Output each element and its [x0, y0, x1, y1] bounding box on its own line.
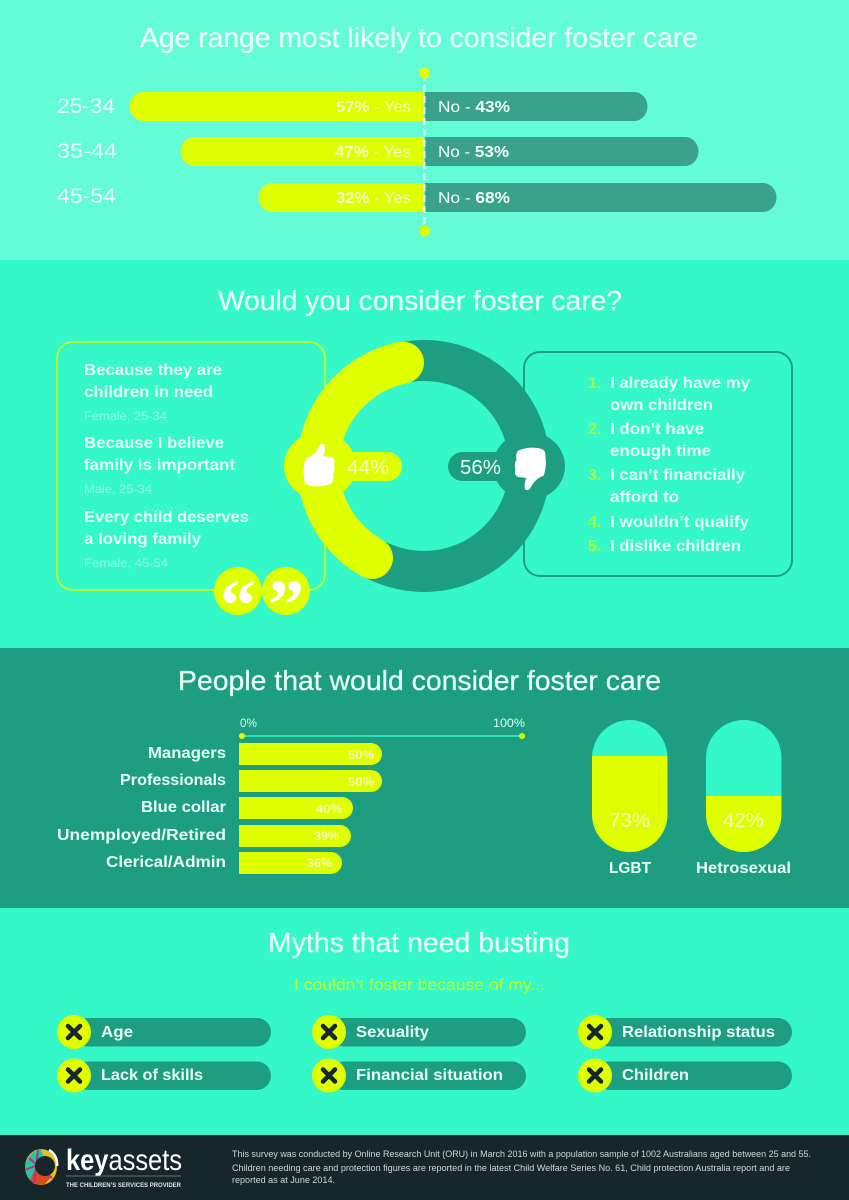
reasons list: 1. [588, 375, 601, 392]
myth: Financial situation [312, 1058, 526, 1092]
reasons list [588, 375, 750, 555]
reasons list: afford to [610, 489, 679, 506]
myth: Relationship status [578, 1015, 792, 1049]
category labels: Blue collar [141, 799, 226, 816]
heading: would you consider: Would you consider foster care? [218, 285, 622, 316]
panel: would you consider [0, 260, 849, 648]
heading: age range: Age range most likely to consider foster care [140, 22, 698, 53]
quotes text: Every child deserves [84, 509, 249, 526]
myth: Children [578, 1058, 792, 1092]
donut chart [284, 360, 565, 572]
myth: Age [57, 1015, 271, 1049]
percent labels: 36% [307, 856, 332, 870]
reasons list: own children [610, 397, 713, 414]
footnote [232, 1149, 811, 1185]
pill chart: Hetrosexual: Hetrosexual [696, 860, 791, 877]
footnote: Children needing care and protection figures are reported in the latest Child Welfare Series No. 61, Child protection Australia report and are [232, 1163, 790, 1173]
category labels: Clerical/Admin [106, 854, 226, 871]
centre axis [419, 68, 430, 236]
pill chart: LGBT: 73% [609, 810, 650, 832]
logo [25, 1144, 182, 1189]
footnote: reported as at June 2014. [232, 1175, 335, 1185]
age labels: 45-54 [57, 185, 116, 208]
pill chart: LGBT: LGBT [609, 860, 651, 877]
pill chart: Hetrosexual: 42% [723, 810, 764, 832]
quotes text: a loving family [84, 531, 201, 548]
value: 44%: 44% [347, 457, 389, 479]
axis [239, 716, 525, 739]
yes labels: 32% - Yes [336, 190, 411, 207]
category labels: Professionals [120, 772, 226, 789]
myth: Lack of skills: Lack of skills [101, 1067, 203, 1084]
reasons list: 5. [588, 538, 601, 555]
icon: quote marks: ” [268, 565, 304, 645]
percent labels: 40% [316, 802, 342, 816]
age labels [57, 95, 117, 208]
quotes text: Female, 25-34 [84, 411, 168, 423]
reasons list: I wouldn’t qualify [610, 514, 749, 531]
reasons list: 4. [588, 514, 601, 531]
tagline: THE CHILDREN’S SERVICES PROVIDER [66, 1182, 181, 1189]
percent labels [307, 748, 374, 870]
myth: Lack of skills [57, 1058, 271, 1092]
age labels: 25-34 [57, 95, 115, 118]
no labels: No - 53% [438, 144, 509, 161]
thumbs up badge [284, 432, 402, 500]
icon: thumbs up [304, 444, 335, 486]
quotes text [84, 362, 249, 570]
percent labels: 39% [314, 829, 339, 843]
bars [239, 743, 382, 874]
myth: Financial situation: Financial situation [356, 1067, 503, 1084]
heading: people: People that would consider foster care [178, 665, 661, 696]
subheading: I couldn’t foster because of my... [294, 977, 545, 994]
icon: quote marks [214, 565, 310, 645]
myth: Age: Age [101, 1024, 133, 1041]
myth: Sexuality: Sexuality [356, 1024, 429, 1041]
bar chart: occupations [57, 716, 525, 874]
no labels [438, 99, 510, 207]
yes labels: 57% - Yes [336, 99, 411, 116]
reasons list: I dislike children [610, 538, 741, 555]
reasons list: enough time [610, 443, 711, 460]
percent labels: 50% [348, 775, 374, 789]
myth: Relationship status: Relationship status [622, 1024, 775, 1041]
yes bars [130, 92, 424, 212]
wordmark: keyassets [66, 1144, 182, 1177]
reasons box [524, 352, 792, 576]
no labels: No - 68% [438, 190, 510, 207]
no bars [425, 92, 776, 212]
panel: people that would consider [0, 648, 849, 908]
quotes text: children in need [84, 384, 213, 401]
category labels [57, 745, 226, 871]
category labels: Unemployed/Retired [57, 827, 226, 844]
thumbs down badge [448, 432, 565, 500]
panel: footer [0, 1135, 849, 1200]
heading: myths: Myths that need busting [268, 927, 570, 958]
yes labels: 47% - Yes [335, 144, 411, 161]
pill chart: LGBT [592, 720, 668, 877]
quotes text: Because I believe [84, 435, 224, 452]
myth: Sexuality [312, 1015, 526, 1049]
reasons list: I already have my [610, 375, 750, 392]
quotes text: Because they are [84, 362, 222, 379]
pill chart: Hetrosexual [696, 720, 791, 877]
age labels: 35-44 [57, 140, 117, 163]
axis: 100% [493, 716, 525, 730]
quotes text: Male, 25-34 [84, 484, 153, 496]
axis: 0% [240, 716, 257, 730]
reasons list: 2. [588, 421, 601, 438]
myth: Children: Children [622, 1067, 689, 1084]
quotes text: Female, 45-54 [84, 558, 169, 570]
icon: quote marks: “ [220, 565, 256, 645]
reasons list: I don’t have [610, 421, 704, 438]
footnote: This survey was conducted by Online Research Unit (ORU) in March 2016 with a population sample of 1002 Australians aged between 25 and 55. [232, 1149, 811, 1159]
quotes text: family is important [84, 457, 236, 474]
category labels: Managers [148, 745, 226, 762]
icon: thumbs down [515, 448, 546, 490]
panel: age range [0, 0, 849, 260]
percent labels: 50% [348, 748, 374, 762]
no labels: No - 43% [438, 99, 510, 116]
value: 56%: 56% [460, 457, 501, 479]
icon: logo mark [25, 1149, 57, 1185]
reasons list: 3. [588, 467, 601, 484]
reasons list: I can’t financially [610, 467, 745, 484]
yes labels [335, 99, 411, 207]
quotes box [57, 342, 325, 590]
panel: myths [0, 908, 849, 1135]
